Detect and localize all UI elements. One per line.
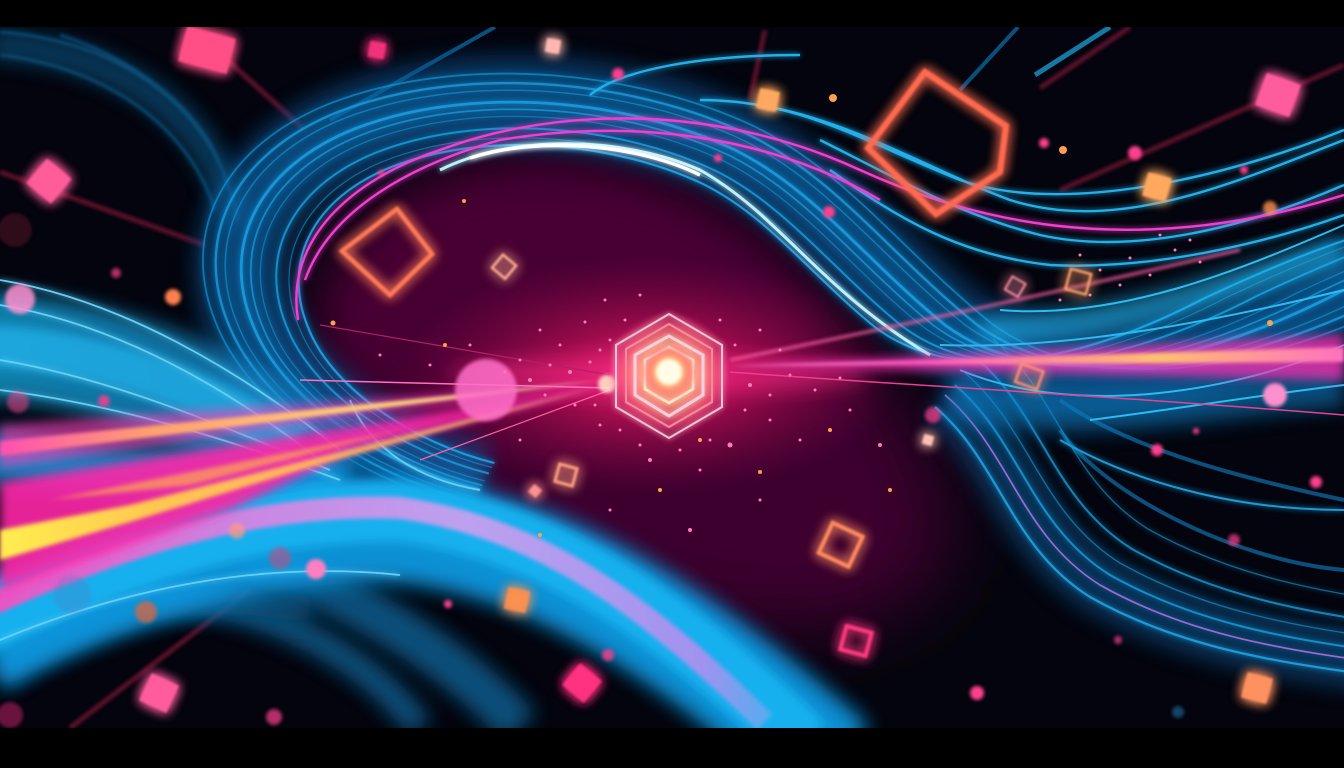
- outlined glowing squares: [342, 72, 1091, 656]
- upper left beam: [0, 383, 600, 468]
- large pink orb: [455, 359, 517, 421]
- right flowing bands: [940, 225, 1344, 420]
- left wide stream with lavender core: [0, 280, 835, 765]
- hexagon core: [607, 311, 731, 438]
- main looping blue stream: [203, 55, 1344, 508]
- dark magenta void: [319, 160, 951, 631]
- lower ribbon: [0, 530, 835, 765]
- small pale orb: [598, 375, 616, 393]
- horizontal haze through core: [450, 357, 870, 393]
- core radial glow: [422, 266, 884, 486]
- outer hexagon rings: [616, 314, 722, 438]
- right laser beams: [300, 250, 1344, 460]
- top-left arc stream: [0, 45, 235, 225]
- particle dust: [378, 234, 1202, 532]
- right lower stream: [935, 339, 1344, 677]
- soft pale orbs: [0, 201, 1287, 728]
- core halo: [607, 311, 731, 435]
- bright white highlight strand: [440, 144, 930, 355]
- lower left wide beam: [0, 385, 610, 590]
- left laser beams: [0, 380, 610, 590]
- bright centre: [641, 344, 697, 400]
- magenta strands in the loop: [296, 118, 1344, 320]
